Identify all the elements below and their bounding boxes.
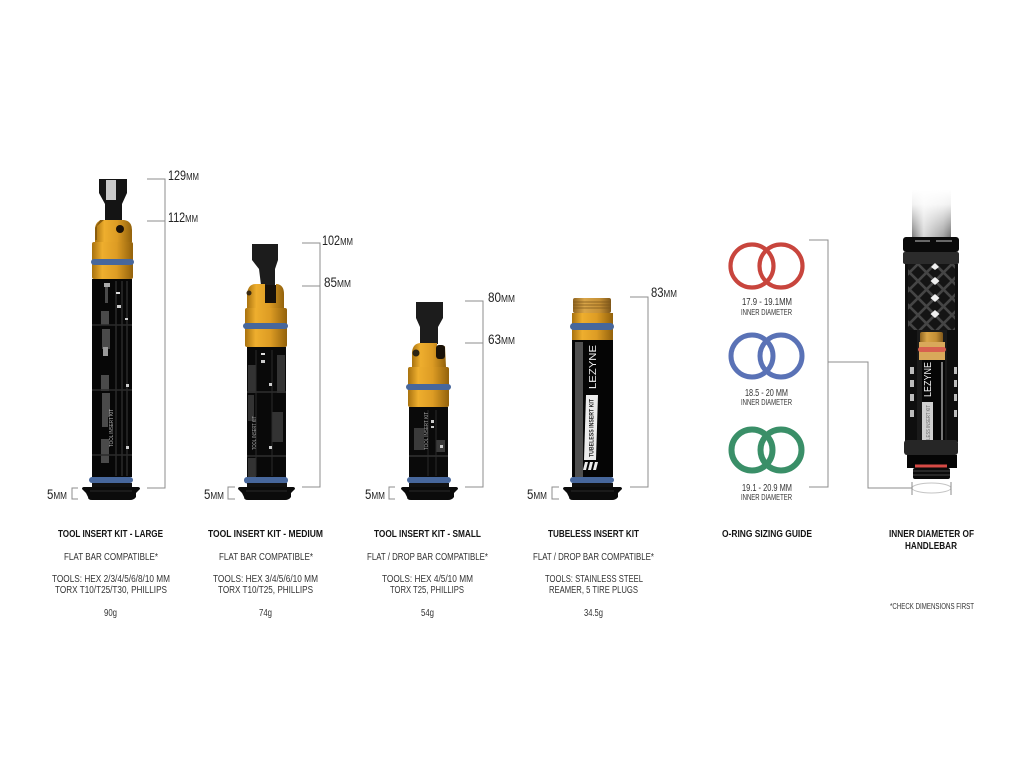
label: 129mm: 129MM <box>168 167 199 183</box>
icon: visible insert <box>917 330 947 462</box>
heading: inner diameter of handlebar: HANDLEBAR <box>905 540 957 552</box>
panel: o-ring sizing guide <box>722 240 912 540</box>
icon: green o-rings <box>732 430 802 470</box>
text: red size <box>741 297 792 317</box>
text: blue size: INNER DIAMETER <box>741 398 792 407</box>
caption: tubeless kit <box>533 528 654 619</box>
label: 83mm: 83MM <box>651 284 677 300</box>
caption: tubeless kit: 34.5g <box>584 608 603 619</box>
heading: inner diameter of handlebar: INNER DIAMETER OF <box>889 528 974 540</box>
label: 63mm: 63MM <box>488 331 515 347</box>
text: red size: 17.9 - 19.1MM <box>742 297 792 308</box>
caption: small kit: 54g <box>421 608 434 619</box>
caption: tubeless kit: TUBELESS INSERT KIT <box>548 528 639 540</box>
dimension bracket: tubeless <box>630 297 648 487</box>
icon: blue o-rings <box>731 335 802 377</box>
text: tubeless insert kit marking: TUBELESS INSERT KIT <box>588 399 596 457</box>
label: white strip <box>584 395 598 460</box>
caption: medium kit <box>208 528 323 619</box>
label: 85mm: 85MM <box>324 274 351 290</box>
text: red size: INNER DIAMETER <box>741 308 792 317</box>
caption: large kit: TOOL INSERT KIT - LARGE <box>58 528 163 540</box>
caption: large kit <box>52 528 170 619</box>
panel: tubeless insert kit <box>527 284 677 619</box>
dimension bracket: large 5mm <box>72 488 78 499</box>
icon: medium tool <box>238 244 295 500</box>
icon: small tool <box>401 302 458 500</box>
label: 5mm: 5MM <box>47 486 67 502</box>
text: green size: 19.1 - 20.9 MM <box>742 483 792 494</box>
panel: tool insert kit small <box>365 289 515 619</box>
caption: tubeless kit: TOOLS: STAINLESS STEEL <box>545 574 643 585</box>
text: blue size: 18.5 - 20 MM <box>745 388 788 399</box>
caption: medium kit: TORX T10/T25, PHILLIPS <box>218 585 313 596</box>
label: 5mm: 5MM <box>365 486 385 502</box>
dimension bracket: large <box>147 179 165 488</box>
caption: small kit <box>367 528 488 619</box>
caption: medium kit: TOOLS: HEX 3/4/5/6/10 MM <box>213 574 318 585</box>
caption: medium kit: 74g <box>259 608 272 619</box>
caption: tubeless kit: REAMER, 5 TIRE PLUGS <box>549 585 638 596</box>
text: large kit insert marking: TOOL INSERT KIT <box>109 409 115 447</box>
panel: tool insert kit large <box>47 167 199 619</box>
dimension bracket: small <box>465 301 483 487</box>
caption: large kit: 90g <box>104 608 117 619</box>
caption: small kit: TOOLS: HEX 4/5/10 MM <box>382 574 473 585</box>
icon: tubeless tool <box>563 298 622 500</box>
heading: inner diameter of handlebar <box>889 528 974 552</box>
text: brand name: LEZYNE <box>588 345 599 389</box>
text: medium kit insert marking: TOOL INSERT KIT <box>252 416 258 450</box>
text: small kit insert marking: TOOL INSERT KIT <box>424 412 430 450</box>
label: 102mm: 102MM <box>322 232 353 248</box>
caption: large kit: TOOLS: HEX 2/3/4/5/6/8/10 MM <box>52 574 170 585</box>
dimension bracket: tubeless 5mm <box>552 487 559 499</box>
caption: medium kit: FLAT BAR COMPATIBLE* <box>219 552 313 563</box>
label: 112mm: 112MM <box>168 209 198 225</box>
panel: handlebar inner diameter <box>889 190 974 611</box>
caption: medium kit: TOOL INSERT KIT - MEDIUM <box>208 528 323 540</box>
icon: large tool <box>82 179 140 500</box>
dimension bracket: medium 5mm <box>228 487 235 499</box>
panel: tool insert kit medium <box>204 232 353 619</box>
bracket: rings to handlebar <box>809 240 912 488</box>
label: 5mm: 5MM <box>204 486 224 502</box>
caption: small kit: TOOL INSERT KIT - SMALL <box>374 528 481 540</box>
caption: large kit: TORX T10/T25/T30, PHILLIPS <box>55 585 167 596</box>
label: 80mm: 80MM <box>488 289 515 305</box>
icon: red o-rings <box>730 244 802 288</box>
text: tubeless label in window: TUBELESS INSERT KIT <box>926 405 932 451</box>
label: 5mm: 5MM <box>527 486 547 502</box>
caption: small kit: FLAT / DROP BAR COMPATIBLE* <box>367 552 488 563</box>
caption: tubeless kit: FLAT / DROP BAR COMPATIBLE* <box>533 552 654 563</box>
heading: o-ring guide: O-RING SIZING GUIDE <box>722 528 812 540</box>
caption: small kit: TORX T25, PHILLIPS <box>390 585 464 596</box>
text: brand name in window: LEZYNE <box>923 362 934 397</box>
text: green size <box>741 483 792 502</box>
icon: diameter oval <box>912 482 951 495</box>
dimension bracket: small 5mm <box>389 487 395 499</box>
text: blue size <box>741 388 792 407</box>
text: green size: INNER DIAMETER <box>741 493 792 502</box>
caption: large kit: FLAT BAR COMPATIBLE* <box>64 552 158 563</box>
icon: handlebar with insert <box>903 190 959 479</box>
footnote: *CHECK DIMENSIONS FIRST <box>890 602 974 611</box>
dimension bracket: medium <box>302 243 320 487</box>
